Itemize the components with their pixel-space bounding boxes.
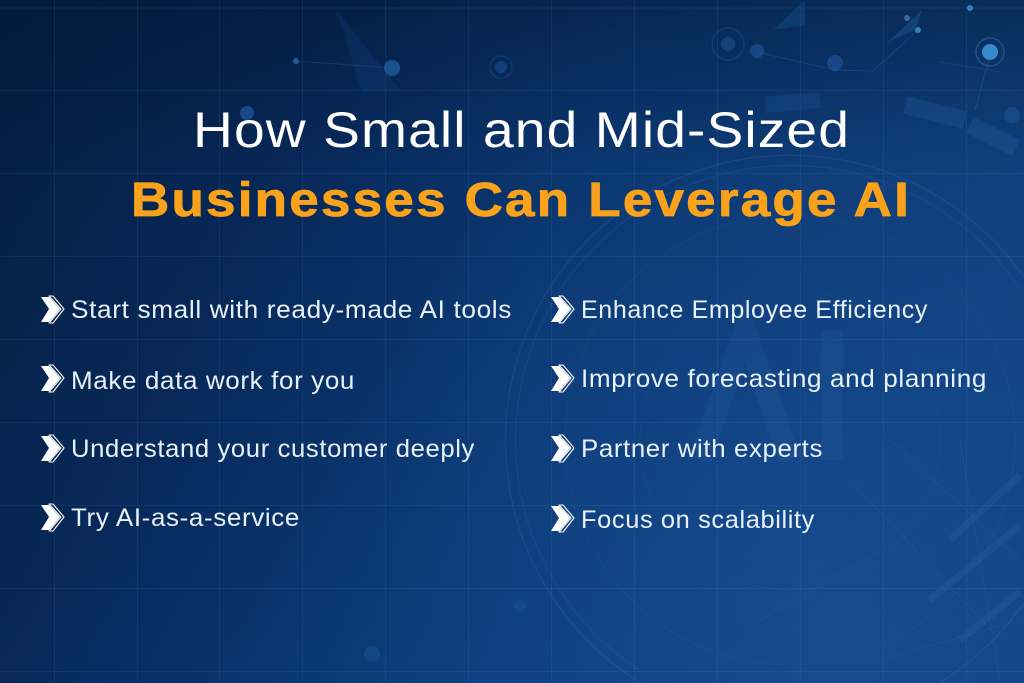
title xyxy=(131,102,911,227)
item: understand customer: Understand your customer deeply xyxy=(71,435,475,463)
title line 1: How Small and Mid-Sized xyxy=(193,102,850,158)
title line 2: Businesses Can Leverage AI xyxy=(131,174,911,227)
item: forecasting: Improve forecasting and planning xyxy=(581,365,987,393)
item: AI-as-a-service: Try AI-as-a-service xyxy=(71,504,300,532)
right column list xyxy=(551,296,987,534)
left column list xyxy=(41,296,512,532)
item: partner with experts: Partner with experts xyxy=(581,435,823,463)
background network nodes xyxy=(240,0,1020,662)
item: employee efficiency: Enhance Employee Efficiency xyxy=(581,296,928,324)
item: make data work: Make data work for you xyxy=(71,367,355,395)
item: scalability: Focus on scalability xyxy=(581,506,815,534)
item: start small: Start small with ready-made AI tools xyxy=(71,296,512,324)
background HUD arcs and AI watermark xyxy=(505,100,1024,683)
